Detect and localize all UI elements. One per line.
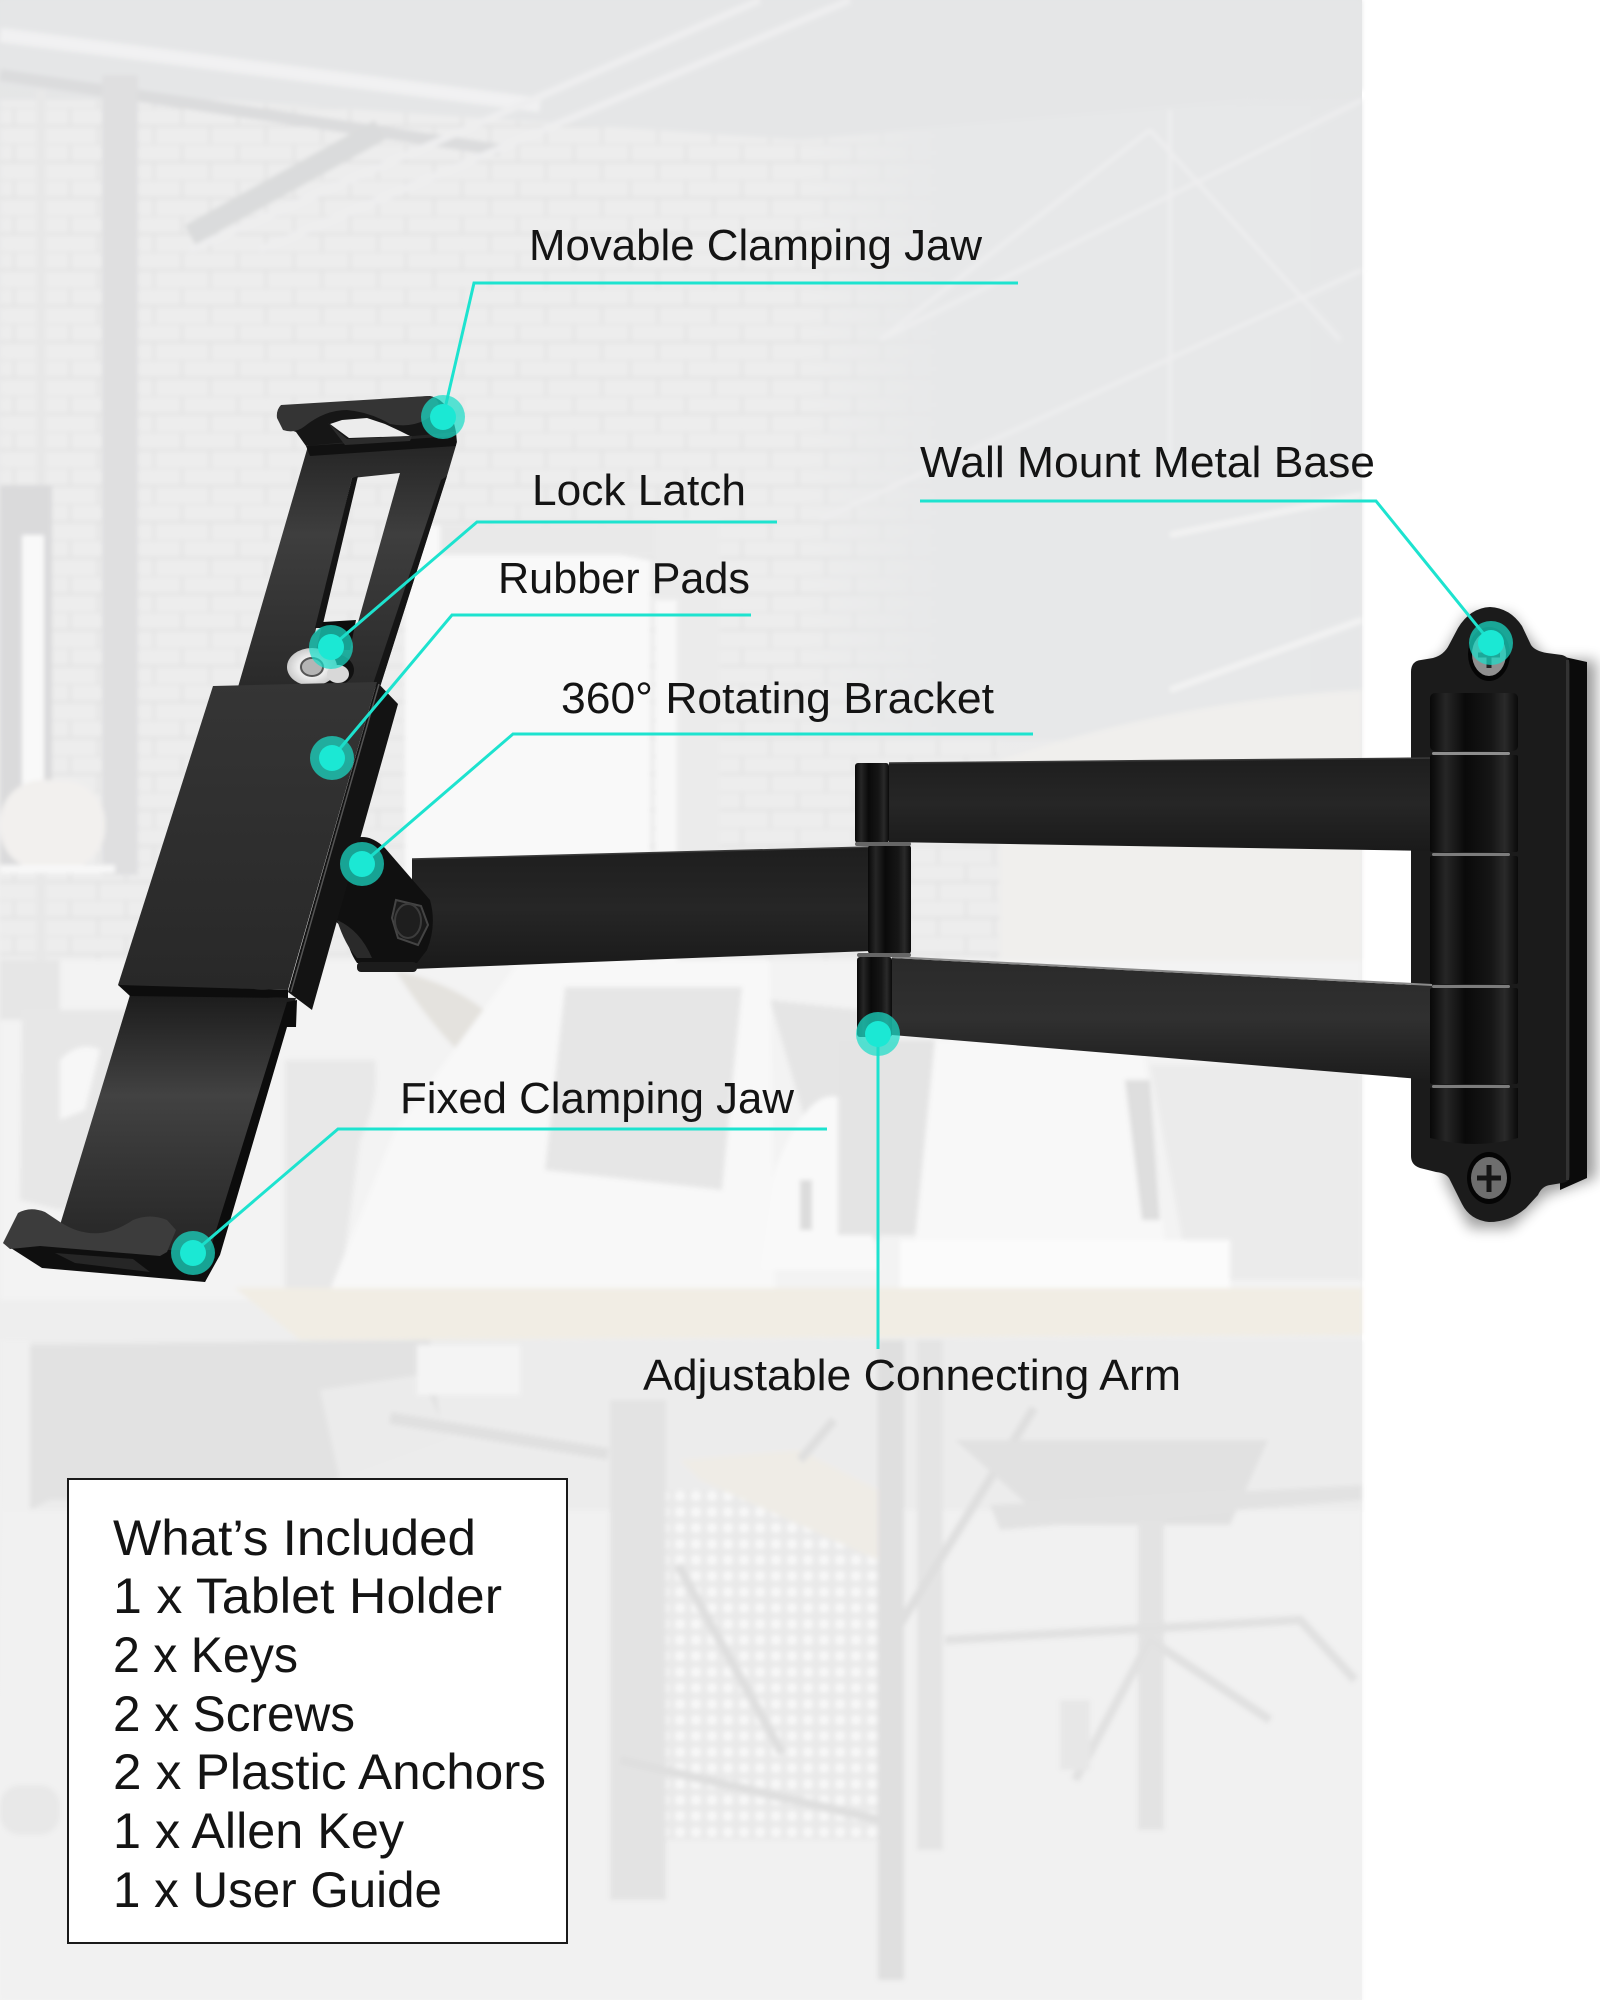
- callout: 360 degree rotating bracket: [340, 674, 1033, 886]
- tablet holder: rubber pad block: [118, 682, 398, 1010]
- callout: fixed clamping jaw: Fixed Clamping Jaw: [400, 1074, 794, 1123]
- panel: what's included: 1 x User Guide: [113, 1862, 442, 1918]
- callout: wall mount metal base: [920, 438, 1513, 665]
- mount: 360 degree rotating bracket: [332, 837, 433, 972]
- callout: lock latch: [309, 466, 777, 669]
- callout: lock latch: Lock Latch: [532, 466, 746, 515]
- callout: adjustable connecting arm: [643, 1012, 1181, 1400]
- callout: fixed clamping jaw: [171, 1074, 827, 1275]
- callout: 360 degree rotating bracket: 360° Rotating Bracket: [561, 674, 994, 723]
- panel: what's included: [68, 1479, 567, 1943]
- tablet holder: lock latch: [287, 620, 356, 687]
- panel: what's included: 1 x Tablet Holder: [113, 1568, 502, 1624]
- callout: movable clamping jaw: [421, 221, 1018, 439]
- mount: wall mount metal base: [1411, 607, 1596, 1228]
- panel: what's included: What’s Included: [113, 1510, 476, 1566]
- panel: what's included: 2 x Keys: [113, 1627, 298, 1683]
- tablet holder: upper slide with movable clamping jaw: [238, 396, 457, 687]
- panel: what's included: 2 x Plastic Anchors: [113, 1744, 546, 1800]
- callout: movable clamping jaw: Movable Clamping Jaw: [529, 221, 982, 270]
- callout: adjustable connecting arm: Adjustable Connecting Arm: [643, 1351, 1181, 1400]
- tablet holder: lower plate and fixed clamping jaw: [3, 995, 297, 1282]
- panel: what's included: 2 x Screws: [113, 1686, 355, 1742]
- mount: adjustable connecting arm: [412, 758, 1432, 1080]
- callout: rubber pads: Rubber Pads: [498, 554, 750, 603]
- callout: wall mount metal base: Wall Mount Metal Base: [920, 438, 1375, 487]
- lower scene: [0, 960, 1362, 1300]
- mount: hinge barrel: [1430, 693, 1518, 1144]
- panel: what's included: 1 x Allen Key: [113, 1803, 404, 1859]
- callout: rubber pads: [310, 554, 751, 780]
